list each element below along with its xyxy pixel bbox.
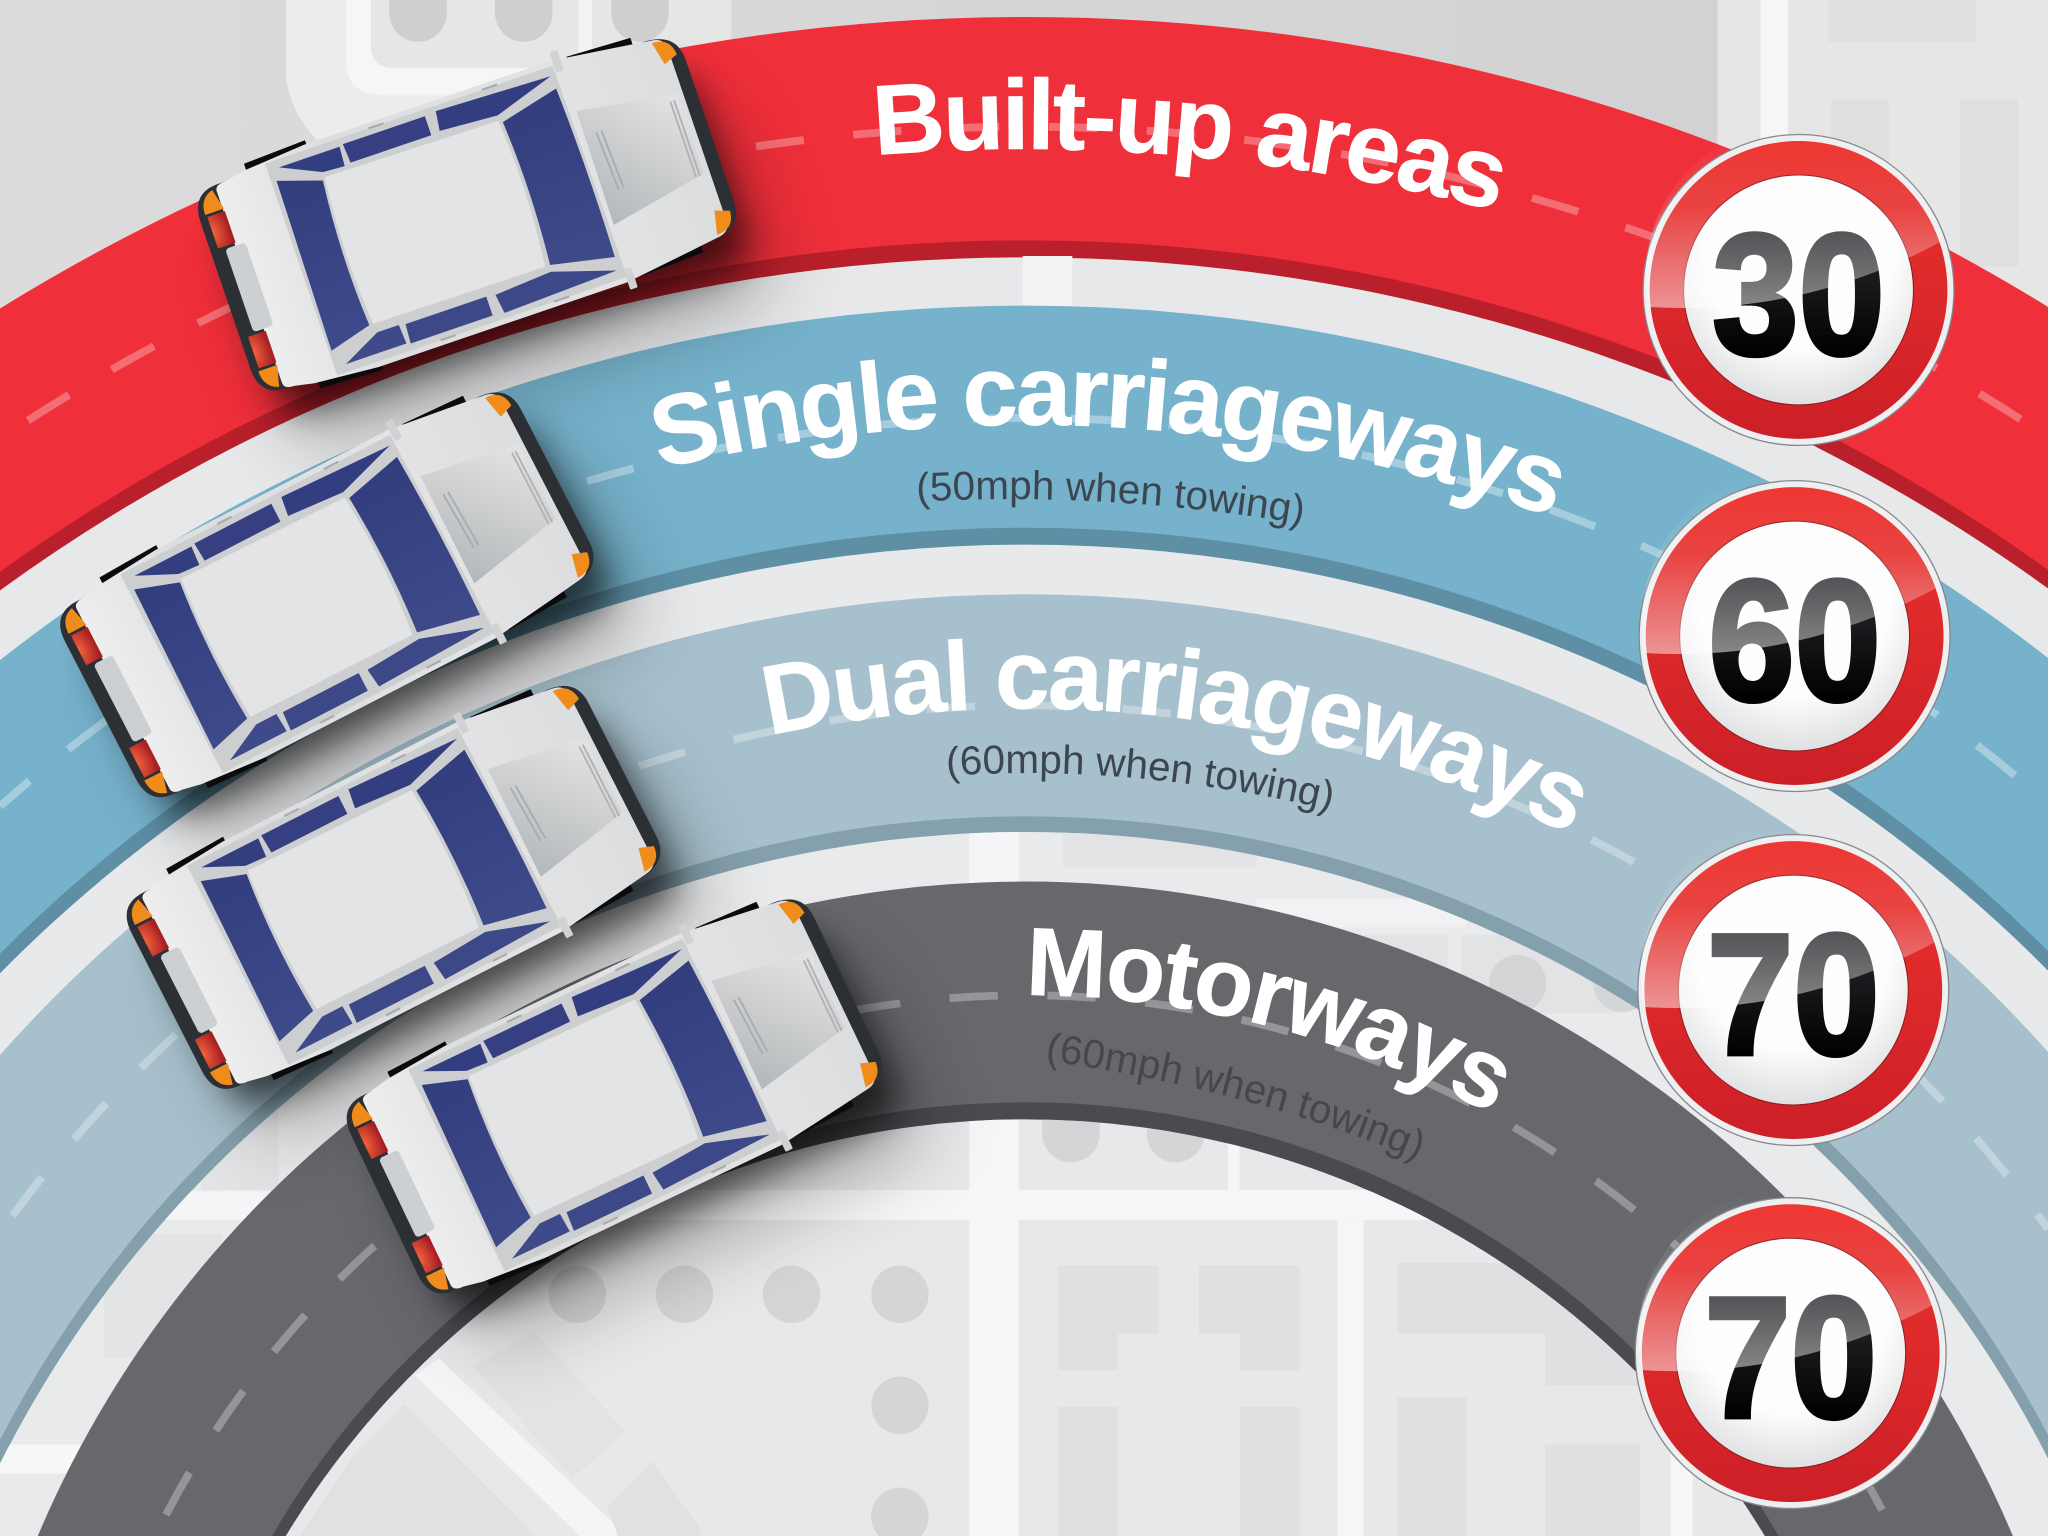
speed sign: 60: 60 [1708, 544, 1881, 737]
road: motorways [38, 882, 2013, 1536]
map inside motorway curve [416, 1120, 1692, 1536]
speed sign: 30 [1643, 125, 1954, 445]
speed sign: 30: 30 [1712, 198, 1885, 391]
speed sign: 70 dual carriageways: 70 [1707, 898, 1880, 1091]
heading: Motorways: Motorways [1031, 928, 1506, 1108]
note: single carriageways towing limit: (50mph when towing) [918, 470, 1302, 531]
speed sign: 60 [1639, 471, 1950, 792]
speed sign: 70 dual carriageways [1638, 825, 1949, 1145]
car on single carriageway [43, 359, 644, 864]
note: motorways towing limit: (60mph when towing) [1048, 1033, 1422, 1164]
note: dual carriageways towing limit: (60mph when towing) [948, 744, 1332, 816]
car on built-up road [185, 8, 776, 459]
road: dual carriageways [0, 594, 2048, 1536]
heading: Single carriageways: Single carriageways [654, 357, 1562, 512]
car on dual carriageway [110, 653, 710, 1156]
car on motorway [330, 867, 930, 1361]
speed sign: 70 motorways [1635, 1188, 1946, 1509]
heading: Dual carriageways: Dual carriageways [763, 638, 1584, 828]
speed sign: 70 motorways: 70 [1704, 1261, 1877, 1454]
heading: Built-up areas: Built-up areas [876, 76, 1502, 207]
